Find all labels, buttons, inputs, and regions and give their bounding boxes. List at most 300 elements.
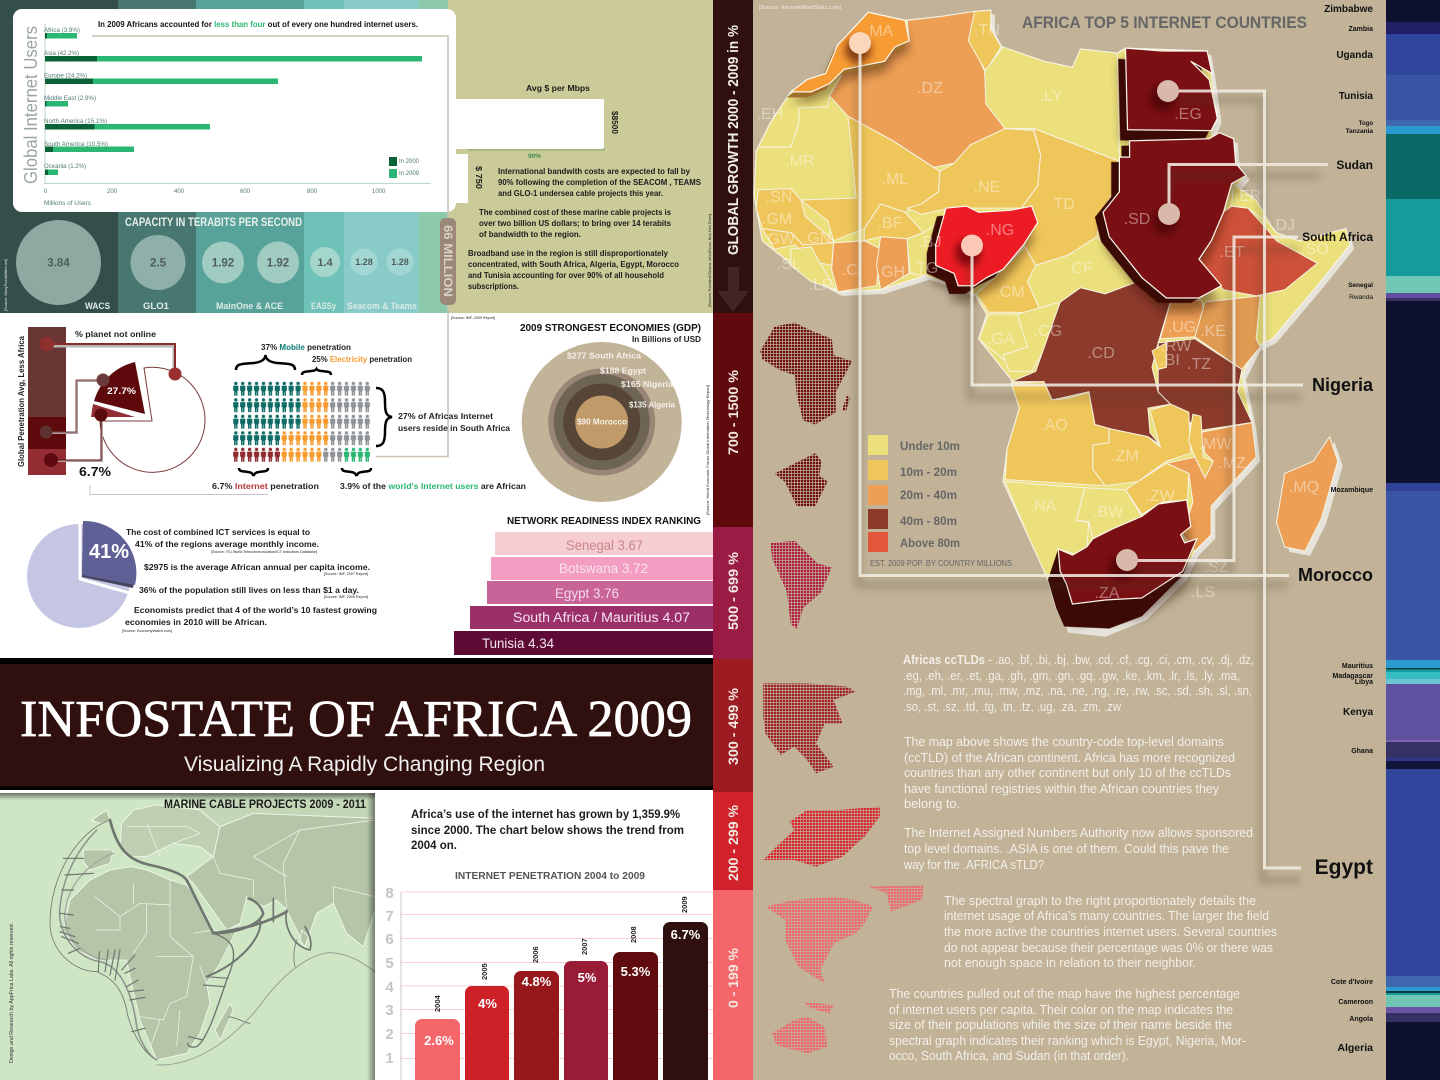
paragraph: countries pulled out	[889, 986, 1246, 1063]
values: $165 Nigeria	[621, 379, 673, 389]
connector: Nigeria	[972, 245, 1303, 385]
country code labels: .TG	[912, 260, 938, 277]
values: $277 South Africa	[567, 350, 641, 360]
paragraph: ccTLD registries: belong to.	[904, 796, 960, 811]
panel: internet penetration chart	[385, 807, 713, 1080]
paragraph: countries pulled out: spectral graph indicates their ranking which is Egypt, Nigeria, Mor-	[889, 1033, 1246, 1048]
country code labels: .CM	[995, 284, 1025, 301]
spectral graph country names: Egypt	[1315, 856, 1373, 879]
country code labels: .GA	[987, 331, 1015, 348]
bar values: 5%	[578, 970, 597, 985]
country code labels: .MZ	[1218, 455, 1246, 472]
country code labels: .EH	[757, 106, 783, 123]
text block: ICT facts: economies in 2010 will be African.	[125, 617, 267, 627]
spectral graph country names: Mauritius	[1342, 663, 1373, 670]
paragraph: countries pulled out: of internet users per capita. Their color on the map indicates the	[889, 1002, 1233, 1017]
spectral graph country names: South Africa	[1302, 230, 1373, 244]
country code labels: .ZM	[1111, 448, 1139, 465]
paragraph two: over two billion US dollars; to bring over 14 terabits	[479, 218, 671, 228]
subheading: In Billions of USD	[632, 334, 701, 344]
pictogram captions: users reside in South Africa	[398, 423, 510, 433]
bar years: 2005	[480, 963, 489, 980]
spectral graph country names: Mozambique	[1331, 487, 1373, 494]
bars	[415, 922, 708, 1080]
intro text: 2004 on.	[411, 838, 457, 852]
source: [Source: ManyPossibilities.net]	[4, 259, 8, 311]
soft shadows of pulled-out countries	[791, 22, 1244, 624]
ninety percent drop marker	[468, 148, 604, 160]
paragraph: spectral graph: internet usage of Africa’s many countries. The larger the field	[944, 908, 1269, 923]
bar years: 2004	[433, 994, 442, 1012]
country code labels: .BW	[1093, 504, 1124, 521]
paragraph: ccTLD registries: (ccTLD) of the African continent. Africa has more recognized	[904, 750, 1235, 765]
country code labels: .GN	[803, 230, 831, 247]
map legend: Under 10m	[900, 439, 960, 453]
spectral graph country names	[1298, 4, 1374, 1054]
country borders	[95, 820, 375, 1048]
bar labels and axis ticks: Africa (3.9%)	[44, 28, 80, 34]
pictogram captions: 27% of Africas Internet	[398, 411, 493, 421]
pictogram captions: 37% Mobile penetration	[261, 342, 351, 352]
range labels: 0 - 199 %	[725, 947, 741, 1008]
paragraph one: International bandwith costs are expected to fall by	[498, 166, 690, 176]
text block: ccTLDs and explanation	[889, 652, 1277, 1063]
heading: NETWORK READINESS INDEX RANKING	[507, 515, 701, 527]
panel: ICT cost pie	[27, 521, 136, 628]
edge shading	[0, 793, 375, 1080]
ccTLD list: .mg, .ml, .mr, .mu, .mw, .mz, .na, .ne, .ng, .re, .rw, .sc, .sd, .sh, .sl, .sn,	[903, 683, 1252, 698]
paragraph: spectral graph: the more active the countries internet users. Several countries	[944, 924, 1277, 939]
paragraph: ccTLD registries: The map above shows the country-code top-level domains	[904, 734, 1224, 749]
source note: [Source: IMF, 2009 Report]	[451, 316, 495, 320]
spectral graph country names: Cote d'Ivoire	[1331, 979, 1373, 986]
bar years: 2008	[629, 926, 638, 943]
country code labels: .CI	[842, 262, 862, 279]
text block: ICT facts: [Source: IMF, 2009 Report]	[324, 595, 368, 599]
paragraph: spectral graph	[944, 893, 1277, 970]
paragraph: spectral graph: do not appear because their percentage was 0% or there was	[944, 940, 1273, 955]
map shapes	[50, 793, 375, 1065]
bar years: 2009	[680, 896, 689, 913]
paragraph three	[468, 248, 679, 291]
pie wedge small	[91, 404, 135, 417]
country code labels: .ER	[1235, 188, 1261, 205]
ninety percent drop marker: 90%	[528, 153, 541, 160]
axis numbers: 5	[385, 955, 394, 972]
source: [Source: InternetWorldStats.com]	[759, 5, 842, 11]
arrow	[717, 267, 749, 312]
dotted world maps	[760, 322, 924, 1053]
paragraph three: subscriptions.	[468, 281, 519, 291]
country code labels: .BI	[1160, 352, 1180, 369]
cable names: MainOne & ACE	[216, 301, 283, 312]
capacity values: 1.92	[267, 258, 289, 270]
heading: AFRICA TOP 5 INTERNET COUNTRIES	[1022, 13, 1307, 32]
capacity values: 3.84	[47, 258, 70, 270]
text block: ICT facts: [Source: EconomyWatch.com]	[122, 629, 172, 633]
bar labels and axis ticks: 400	[174, 189, 185, 195]
bar labels and axis ticks: Millions of Users	[44, 201, 91, 207]
country code labels	[757, 22, 1329, 602]
ranking bars	[454, 532, 713, 655]
panel: capacity colour bands	[0, 0, 713, 313]
spectral graph country names: Togo	[1359, 121, 1373, 127]
bar labels and axis ticks	[44, 28, 420, 207]
cable names: EASSy	[311, 301, 337, 312]
capacity values	[47, 257, 409, 270]
bar values: 6.7%	[671, 927, 701, 942]
axis numbers: 1	[385, 1050, 394, 1067]
paragraph: sponsored domains: way for the .AFRICA sTLD?	[903, 857, 1044, 872]
country code labels: .ZW	[1145, 488, 1176, 505]
country code labels: .ZA	[1095, 585, 1120, 602]
paragraph one	[498, 166, 701, 198]
spectral graph country names: Rwanda	[1349, 294, 1373, 301]
cable names	[85, 301, 417, 312]
connector: Morocco	[860, 43, 1289, 576]
panel: global internet users chart	[13, 9, 604, 212]
axis numbers	[385, 885, 394, 1067]
spectral graph country names: Nigeria	[1312, 375, 1374, 395]
pie wedge	[82, 521, 136, 588]
dot map: northern continents	[763, 683, 924, 1053]
map legend: Above 80m	[900, 536, 960, 550]
axis numbers: 6	[385, 931, 394, 948]
capacity values: 1.28	[355, 257, 373, 267]
map: Africa top 5 internet countries	[754, 5, 1354, 880]
pie wedge large	[94, 362, 145, 414]
country code labels: .CD	[1087, 345, 1115, 362]
cable names: GLO1	[143, 301, 170, 312]
text block: ICT facts: 36% of the population still lives on less than $1 a day.	[139, 585, 359, 595]
country code labels: .GH	[877, 264, 905, 281]
connector dots	[40, 337, 182, 467]
range labels: 700 - 1500 %	[725, 369, 741, 455]
axis numbers: 8	[385, 885, 394, 902]
source: [Source: World Economic Forum Global Information Technology Report]	[706, 385, 710, 515]
intro text: Africa’s use of the internet has grown by 1,359.9%	[411, 807, 680, 821]
values: $135 Algeria	[629, 400, 675, 410]
paper edge	[758, 14, 1354, 637]
map heading: MARINE CABLE PROJECTS 2009 - 2011	[164, 799, 367, 811]
main title: INFOSTATE OF AFRICA 2009	[20, 691, 692, 748]
spectral graph country names: Senegal	[1348, 282, 1373, 289]
bar values: 5.3%	[621, 964, 651, 979]
ranking labels: Senegal 3.67	[566, 538, 643, 553]
bar labels and axis ticks: 800	[307, 189, 318, 195]
axis numbers: 2	[385, 1026, 394, 1043]
map legend: EST. 2009 POP. BY COUNTRY MILLIONS	[870, 559, 1012, 568]
text block: ICT facts: Economists predict that 4 of the world’s 10 fastest growing	[134, 605, 377, 615]
text block: ICT facts	[122, 527, 377, 633]
paragraph: spectral graph: The spectral graph to the right proportionately details the	[944, 893, 1256, 908]
map legend: 10m - 20m	[900, 465, 957, 479]
paragraph: spectral graph: not enough space in relation to their neighbor.	[944, 955, 1196, 970]
country code labels: .MW	[1199, 436, 1232, 453]
bar labels and axis ticks: In 2009	[399, 171, 420, 177]
country code labels: .KE	[1200, 323, 1226, 340]
chart heading: INTERNET PENETRATION 2004 to 2009	[455, 870, 645, 882]
country code labels: .MA	[865, 23, 894, 40]
pictogram captions: 25% Electricity penetration	[312, 354, 412, 364]
ccTLD list	[903, 652, 1254, 714]
bar labels and axis ticks: North America (15.1%)	[44, 119, 107, 125]
connector: South Africa	[1127, 237, 1298, 560]
capacity values: 1.28	[391, 257, 409, 267]
paragraph two: The combined cost of these marine cable projects is	[479, 207, 671, 217]
bar labels and axis ticks: In 2000	[399, 159, 420, 165]
text block: ICT facts: The cost of combined ICT services is equal to	[126, 527, 310, 537]
capacity values: 2.5	[150, 258, 167, 270]
country code labels: .SO	[1301, 241, 1329, 258]
cable names: Seacom & Teams	[347, 301, 417, 312]
range labels: 200 - 299 %	[725, 804, 741, 881]
range labels	[725, 369, 741, 1008]
continent shapes	[754, 10, 1354, 637]
paragraph one: 90% following the completion of the SEACOM , TEAMS	[498, 177, 701, 187]
paragraph: countries pulled out: size of their populations while the size of their name beside the	[889, 1017, 1232, 1032]
country code labels: .DJ	[1271, 217, 1295, 234]
country code labels: .NA	[1030, 498, 1057, 515]
country code labels: .BJ	[918, 234, 942, 251]
dot shadows	[845, 37, 1178, 581]
country code labels: .GW	[763, 231, 796, 248]
country code labels: .LR	[809, 277, 833, 294]
bar labels and axis ticks: Middle East (2.9%)	[44, 96, 96, 102]
legend	[389, 157, 397, 178]
heading: 2009 STRONGEST ECONOMIES (GDP)	[520, 322, 701, 334]
axis numbers: 3	[385, 1002, 394, 1019]
ccTLD list: Africas ccTLDs - .ao, .bf, .bi, .bj, .bw, .cd, .cf, .cg, .ci, .cm, .cv, .dj, .dz,	[903, 652, 1254, 667]
price labels	[474, 111, 620, 189]
paragraph three: concentrated, with South Africa, Algeria, Egypt, Morocco	[468, 259, 679, 269]
bar labels and axis ticks: 600	[240, 189, 251, 195]
source: [Sources: President?Obama, AfricaFocus, New York Times]	[708, 214, 712, 307]
chart title sentence: In 2009 Africans accounted for less than four out of every one hundred internet users.	[98, 19, 418, 29]
pictogram captions	[212, 342, 526, 491]
country code labels: .SZ	[1204, 559, 1229, 576]
range labels: 300 - 499 %	[725, 687, 741, 765]
connector: Egypt	[1168, 91, 1301, 868]
spectral graph country names: Cameroon	[1338, 999, 1373, 1006]
ranking labels: Botswana 3.72	[559, 561, 648, 576]
panel: Africa map background	[753, 0, 1386, 1080]
paragraph: ccTLD registries	[904, 734, 1235, 811]
heading: CAPACITY IN TERABITS PER SECOND	[125, 217, 302, 229]
spectral graph country names: Angola	[1349, 1016, 1373, 1023]
values	[567, 350, 675, 426]
spectral graph country names: Kenya	[1343, 707, 1373, 718]
spectral graph country names: Zimbabwe	[1324, 4, 1373, 15]
concentric circles	[522, 342, 682, 502]
country code labels: .TN	[974, 22, 1000, 39]
pie labels: 27.7%	[107, 386, 136, 396]
cable lines	[50, 820, 375, 1065]
values: $90 Morocco	[577, 416, 627, 426]
paragraph two	[479, 207, 671, 239]
bar labels and axis ticks: 200	[107, 189, 118, 195]
capacity values: 1.4	[317, 257, 334, 269]
connector end dots	[849, 32, 1180, 571]
country code labels: .RW	[1161, 338, 1192, 355]
column title: GLOBAL GROWTH 2000 - 2009 in %	[725, 25, 742, 255]
country code labels: .EG	[1174, 106, 1202, 123]
price labels: $8500	[610, 111, 620, 134]
pie labels: 6.7%	[79, 464, 111, 479]
penetration stacked column	[28, 327, 66, 475]
paragraph: countries pulled out: The countries pulled out of the map have the highest percentage	[889, 986, 1240, 1001]
country code labels: .MR	[785, 153, 815, 170]
spectral graph country names: Madagascar	[1333, 673, 1373, 680]
map legend: 20m - 40m	[900, 488, 957, 502]
ranking labels	[482, 538, 690, 651]
intro text: since 2000. The chart below shows the trend from	[411, 823, 684, 837]
intro text	[411, 807, 684, 852]
country code labels: .TZ	[1187, 356, 1211, 373]
pictogram grid	[233, 382, 371, 464]
paragraph: ccTLD registries: countries than any other continent but only 10 of the ccTLDs	[904, 765, 1231, 780]
pulled-out top five countries	[791, 12, 1246, 604]
paragraph three: Broadband use in the region is still disproportionately	[468, 248, 668, 258]
country code labels: .CF	[1067, 260, 1093, 277]
values: $188 Egypt	[600, 366, 646, 376]
country code labels: .GM	[762, 211, 792, 228]
panel: global penetration pie	[16, 327, 205, 479]
paragraph one: and GLO-1 undersea cable projects this year.	[498, 188, 663, 198]
bar values	[424, 927, 701, 1048]
capacity circles	[16, 220, 414, 305]
country fills	[756, 10, 1338, 580]
pie labels	[75, 329, 156, 479]
bar labels and axis ticks: 0	[44, 189, 48, 195]
country code labels: .SN	[766, 189, 792, 206]
bar values: 4.8%	[522, 974, 552, 989]
avg price heading: Avg $ per Mbps	[526, 83, 590, 93]
subtitle: Visualizing A Rapidly Changing Region	[184, 753, 545, 776]
spectral graph country names: Ghana	[1351, 748, 1373, 755]
base yellow countries	[754, 10, 1350, 629]
text block: ICT facts: [Source: IMF, 2007 Report]	[324, 572, 368, 576]
bar labels and axis ticks: Europe (24.2%)	[44, 74, 87, 80]
paragraph three: and Tunisia accounting for over 90% of all household	[468, 270, 664, 280]
connector lines	[46, 344, 175, 461]
bars	[44, 24, 431, 184]
bar years: 2007	[580, 938, 589, 955]
country code labels: .UG	[1168, 319, 1196, 336]
spectral graph country names: Tanzania	[1346, 128, 1373, 135]
spectral graph country names: Morocco	[1298, 565, 1373, 585]
panel: people pictogram	[212, 342, 526, 491]
country code labels: .SL	[777, 256, 801, 273]
ranking labels: Egypt 3.76	[555, 586, 619, 601]
ccTLD list: .so, .st, .sz, .td, .tg, .tn, .tz, .ug, .za, .zm, .zw	[903, 699, 1122, 714]
range labels: 500 - 699 %	[725, 551, 741, 630]
connector: Sudan	[1169, 164, 1328, 214]
pie background	[27, 524, 131, 628]
spectral graph country names: Sudan	[1336, 158, 1373, 172]
paragraph two: of bandwidth to the region.	[479, 229, 581, 239]
callout: 66 million: 66 MILLION	[441, 225, 455, 297]
panel: marine cable map	[0, 793, 375, 1080]
country code labels: .SD	[1124, 211, 1150, 228]
ranking labels: South Africa / Mauritius 4.07	[513, 610, 690, 625]
credit line: Design and Research by AppFrica Labs. All rights reserved.	[9, 923, 15, 1063]
country code labels: .LS	[1191, 584, 1215, 601]
connector line from chart to South Africa note	[92, 36, 448, 456]
paragraph: countries pulled out: occo, South Africa, and Sudan (in that order).	[889, 1048, 1129, 1063]
panel: network readiness ranking	[454, 515, 713, 655]
paragraph: ccTLD registries: have functional registries within the African countries they	[904, 781, 1219, 796]
panel: bandwidth cost text	[468, 83, 712, 307]
map legend	[868, 435, 1012, 568]
spectral graph country names: Libya	[1355, 679, 1373, 686]
country code labels: .AO	[1040, 417, 1068, 434]
wedge value: 41%	[89, 541, 129, 563]
callout: 66 million	[440, 218, 456, 305]
bar values: 4%	[478, 996, 497, 1011]
bar years: 2006	[531, 946, 540, 963]
country code labels: .NG	[986, 222, 1014, 239]
axis title: Global Penetration Avg, Less Africa	[16, 336, 26, 467]
text block: ICT facts: 41% of the regions average monthly income.	[135, 539, 319, 549]
vertical axis title: Global Internet Users	[21, 26, 41, 184]
panel: capacity in terabits per second	[4, 217, 417, 312]
connector shadows	[858, 60, 1320, 880]
capacity values: 1.92	[212, 258, 234, 270]
country code labels: .NE	[974, 179, 1000, 196]
cable names: WACS	[85, 301, 110, 312]
country code labels: .MQ	[1289, 479, 1319, 496]
spectral graph country names: Zambia	[1348, 26, 1373, 33]
ccTLD list: .eg, .eh, .er, .et, .ga, .gh, .gm, .gn, .gq, .gw, .ke, .km, .lr, .ls, .ly, .ma,	[903, 668, 1240, 683]
ranking labels: Tunisia 4.34	[482, 636, 554, 651]
panel: strongest economies	[520, 322, 710, 515]
bar labels and axis ticks: Oceania (1.2%)	[44, 164, 86, 170]
axis numbers: 4	[385, 979, 394, 996]
bar values: 2.6%	[424, 1033, 454, 1048]
pictogram captions: 6.7% Internet penetration	[212, 481, 319, 491]
bar labels and axis ticks: 1000	[372, 189, 386, 195]
hard shadows	[927, 59, 1238, 629]
spectral graph country names: Tunisia	[1339, 91, 1373, 102]
panel: title band	[0, 658, 713, 790]
panel: growth scale column	[713, 0, 753, 1080]
country code labels: .TD	[1049, 196, 1075, 213]
spectral graph country names: Uganda	[1336, 50, 1373, 61]
axis numbers: 7	[385, 908, 394, 925]
country code labels: .DZ	[917, 80, 943, 97]
text block: ICT facts: $2975 is the average African annual per capita income.	[144, 562, 370, 572]
gridlines	[401, 892, 713, 1080]
paragraph: sponsored domains	[903, 825, 1253, 872]
text block: ICT facts: [Source: ITU World Telecommunication/ICT Indicators Database]	[211, 550, 317, 554]
bar years	[433, 896, 689, 1012]
paragraph: sponsored domains: top level domains. .ASIA is one of them. Could this pave the	[904, 841, 1229, 856]
pie remainder	[100, 367, 205, 472]
bar labels and axis ticks: South America (10.5%)	[44, 142, 108, 148]
map legend: 40m - 80m	[900, 514, 957, 528]
spectral graph country names: Algeria	[1337, 1042, 1373, 1054]
country code labels: .ET	[1220, 244, 1245, 261]
country code labels: .CG	[1034, 323, 1062, 340]
dot map: Africa	[760, 322, 852, 629]
paragraph: sponsored domains: The Internet Assigned Numbers Authority now allows sponsored	[904, 825, 1253, 840]
braces	[236, 355, 392, 476]
bar labels and axis ticks: Asia (42.2%)	[44, 51, 79, 57]
price labels: $ 750	[474, 166, 484, 189]
pictogram captions: 3.9% of the world’s Internet users are African	[340, 481, 526, 491]
spectral graph colour bands	[1386, 0, 1440, 1080]
